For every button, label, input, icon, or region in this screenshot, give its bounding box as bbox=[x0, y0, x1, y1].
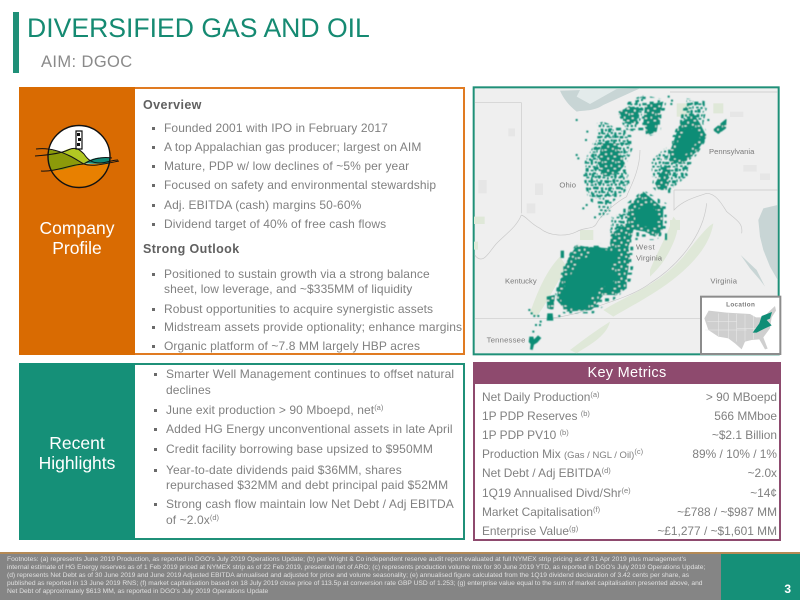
footnotes: (d) represents Net Debt as of 30 June 2019 and June 2019 Adjusted EBITDA annualised and adjusted for price and volume seasonality; (e) annualised figure calculated from the 1Q19 dividend declaration of 3.42 cents per share, as bbox=[7, 572, 689, 579]
footnotes bbox=[7, 556, 705, 595]
row: reserves: 1P PDP Reserves (b) bbox=[482, 409, 590, 423]
label: company profile: Profile bbox=[52, 238, 102, 258]
bullet: cash flow: Strong cash flow maintain low Net Debt / Adj EBITDA bbox=[166, 497, 454, 511]
panel: key metrics bbox=[473, 362, 781, 541]
title accent bar bbox=[13, 12, 19, 73]
heading: overview: Overview bbox=[143, 98, 202, 112]
bullet: cash flow continued: of ~2.0x(d) bbox=[166, 513, 219, 527]
map labels: Virginia bbox=[636, 254, 663, 263]
footnotes: Footnotes: (a) represents June 2019 Production, as reported in DGO's July 2019 Operations Update; (b) per Wright & Co independent reserve audit report evaluated at full NYMEX strip pricing as of 31 Apr 2019 plus management's bbox=[7, 556, 686, 563]
row: production mix: Production Mix (Gas / NGL / Oil)(c) bbox=[482, 447, 643, 461]
icon: company logo bbox=[34, 124, 120, 188]
overview and outlook text bbox=[143, 98, 462, 353]
row: production mix: 89% / 10% / 1% bbox=[692, 447, 777, 461]
panel: recent highlights bbox=[19, 363, 465, 540]
bullet: dividends: Year-to-date dividends paid $36MM, shares bbox=[166, 463, 402, 477]
map labels bbox=[487, 147, 755, 345]
row: leverage: ~2.0x bbox=[748, 466, 777, 480]
map labels: Virginia bbox=[710, 277, 738, 286]
inset: us outline bbox=[704, 306, 776, 349]
map labels: Kentucky bbox=[505, 276, 537, 285]
row: enterprise value: Enterprise Value(g) bbox=[482, 524, 578, 538]
bullet: well management: Smarter Well Management continues to offset natural bbox=[166, 367, 454, 381]
page number block: 3 bbox=[784, 582, 791, 596]
row: pv10 bbox=[482, 428, 777, 442]
bullet: safety: Focused on safety and environmental stewardship bbox=[164, 178, 436, 192]
row: reserves: 566 MMboe bbox=[714, 409, 777, 423]
key metrics header bbox=[473, 362, 781, 384]
bullet: growth: Positioned to sustain growth via a strong balance bbox=[164, 267, 430, 281]
map labels: Pennsylvania bbox=[709, 147, 755, 156]
row: dividend bbox=[482, 486, 777, 500]
title: DIVERSIFIED GAS AND OIL bbox=[27, 13, 370, 43]
bullet: credit facility: Credit facility borrowing base upsized to $950MM bbox=[166, 442, 433, 456]
row: pv10: ~$2.1 Billion bbox=[712, 428, 777, 442]
bullet: dividends continued: repurchased $32MM and debt principal paid $52MM bbox=[166, 478, 448, 492]
bullet: producer: A top Appalachian gas producer; largest on AIM bbox=[164, 140, 421, 154]
panel: company profile bbox=[19, 87, 465, 355]
inset: location map bbox=[701, 297, 780, 354]
footer band bbox=[0, 552, 800, 600]
bullet: margins: Adj. EBITDA (cash) margins 50-60% bbox=[164, 198, 361, 212]
heading: strong outlook: Strong Outlook bbox=[143, 242, 240, 256]
row: reserves bbox=[482, 409, 777, 423]
label: company profile bbox=[40, 218, 114, 258]
row: enterprise value bbox=[482, 524, 777, 538]
row: enterprise value: ~£1,277 / ~$1,601 MM bbox=[657, 524, 777, 538]
row: pv10: 1P PDP PV10 (b) bbox=[482, 428, 569, 442]
bullet: growth continued: sheet, low leverage, and ~$335MM of liquidity bbox=[164, 282, 412, 296]
bullet: opportunities: Robust opportunities to acquire synergistic assets bbox=[164, 302, 433, 316]
row: market cap: Market Capitalisation(f) bbox=[482, 505, 600, 519]
bullet: hg energy: Added HG Energy unconventional assets in late April bbox=[166, 422, 453, 436]
bullet: dividend: Dividend target of 40% of free cash flows bbox=[164, 217, 386, 231]
inset heading: Location bbox=[726, 302, 755, 309]
bullet: mature: Mature, PDP w/ low declines of ~5% per year bbox=[164, 159, 409, 173]
recent highlights label block bbox=[19, 363, 135, 540]
inset: operating region bbox=[753, 312, 772, 333]
row: market cap: ~£788 / ~$987 MM bbox=[677, 505, 777, 519]
company profile label block bbox=[19, 87, 135, 355]
row: net daily production bbox=[482, 390, 777, 404]
label: recent highlights: Highlights bbox=[39, 453, 115, 473]
highlights text bbox=[154, 367, 454, 527]
row: dividend: 1Q19 Annualised Divd/Shr(e) bbox=[482, 486, 631, 500]
map of operating area bbox=[472, 86, 782, 356]
label: recent highlights bbox=[39, 433, 115, 473]
subtitle: AIM: DGOC bbox=[41, 53, 133, 71]
producing well clusters bbox=[529, 95, 727, 350]
bullet: founded: Founded 2001 with IPO in February 2017 bbox=[164, 121, 388, 135]
page number block bbox=[721, 554, 800, 600]
bullet: midstream: Midstream assets provide optionality; enhance margins bbox=[164, 320, 462, 334]
row: net daily production: Net Daily Production(a) bbox=[482, 390, 600, 404]
map labels: Ohio bbox=[559, 180, 576, 189]
bullet: june exit: June exit production > 90 Mboepd, net(a) bbox=[166, 403, 383, 417]
footnotes: published as reported in 13 June 2019 RNS; (f) market capitalisation based on 18 July 2019 close price of 113.5p at conversion rate GBP USD of 1.253; (g) enterprise value equal to the sum of market capitalisation presented above, and bbox=[7, 580, 703, 587]
bullet: platform: Organic platform of ~7.8 MM largely HBP acres bbox=[164, 339, 420, 353]
footnotes: internal estimate of HG Energy reserves as of 1 Feb 2019 priced at NYMEX strip as of 22 Feb 2019, presented net of ARO; (c) represents production volume mix for 30 June 2019 YTD, as reported in DGO's July 2019 Operations Update; bbox=[7, 564, 705, 571]
map labels: Tennessee bbox=[487, 336, 525, 345]
row: dividend: ~14¢ bbox=[750, 486, 777, 500]
row: leverage bbox=[482, 466, 777, 480]
row: market cap bbox=[482, 505, 777, 519]
row: production mix bbox=[482, 447, 777, 461]
bullet: well management continued: declines bbox=[166, 383, 211, 397]
row: leverage: Net Debt / Adj EBITDA(d) bbox=[482, 466, 611, 480]
map labels: West bbox=[636, 242, 656, 251]
footnotes: Net Debt of approximately $613 MM, as reported in DGO's July 2019 Operations Update bbox=[7, 588, 268, 595]
label: recent highlights: Recent bbox=[49, 433, 105, 453]
row: net daily production: > 90 MBoepd bbox=[706, 390, 777, 404]
key metrics header: Key Metrics bbox=[587, 365, 667, 381]
label: company profile: Company bbox=[40, 218, 114, 238]
